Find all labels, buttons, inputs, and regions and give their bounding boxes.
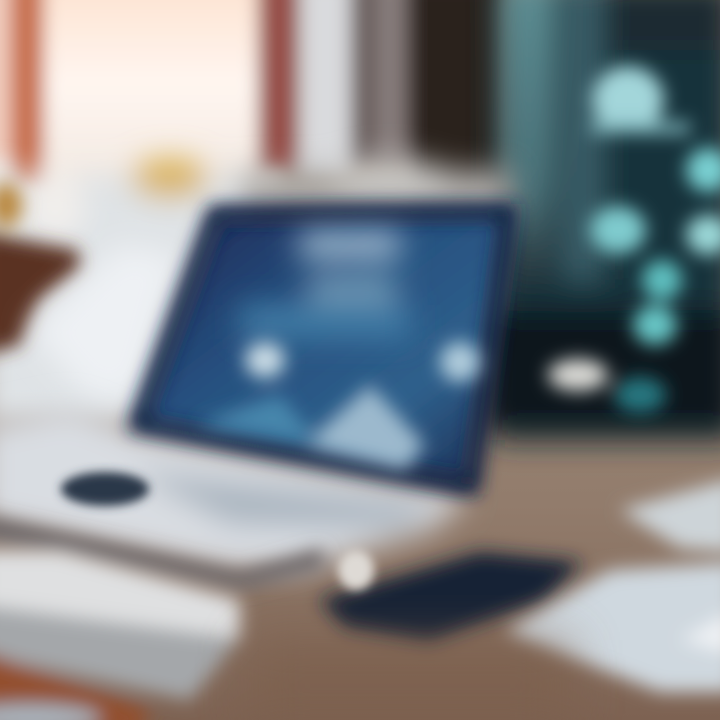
laptop trackpad dark object [61, 472, 149, 506]
table: warm shadow below phone [250, 640, 570, 720]
background: window and curtains [0, 0, 505, 210]
object: brown desk item on the left [0, 183, 82, 355]
screen panel [135, 208, 512, 490]
phone on the table [320, 552, 582, 642]
left: bright wall and shelf [0, 158, 510, 425]
background: dark teal monitor wall [480, 0, 720, 440]
object: white paper behind laptop [30, 245, 180, 400]
laptop front edge shadow [0, 515, 325, 590]
screen dark bezel [138, 212, 508, 486]
laptop screen [135, 208, 512, 490]
screen highlights [195, 342, 480, 470]
bottom left: white notebook and table edge [0, 550, 240, 720]
right: white notebook on table [505, 478, 720, 692]
screen content glow [240, 232, 410, 339]
monitor: glowing teal blobs [548, 66, 720, 413]
laptop base and keyboard [0, 405, 470, 570]
phone highlight [338, 550, 374, 590]
